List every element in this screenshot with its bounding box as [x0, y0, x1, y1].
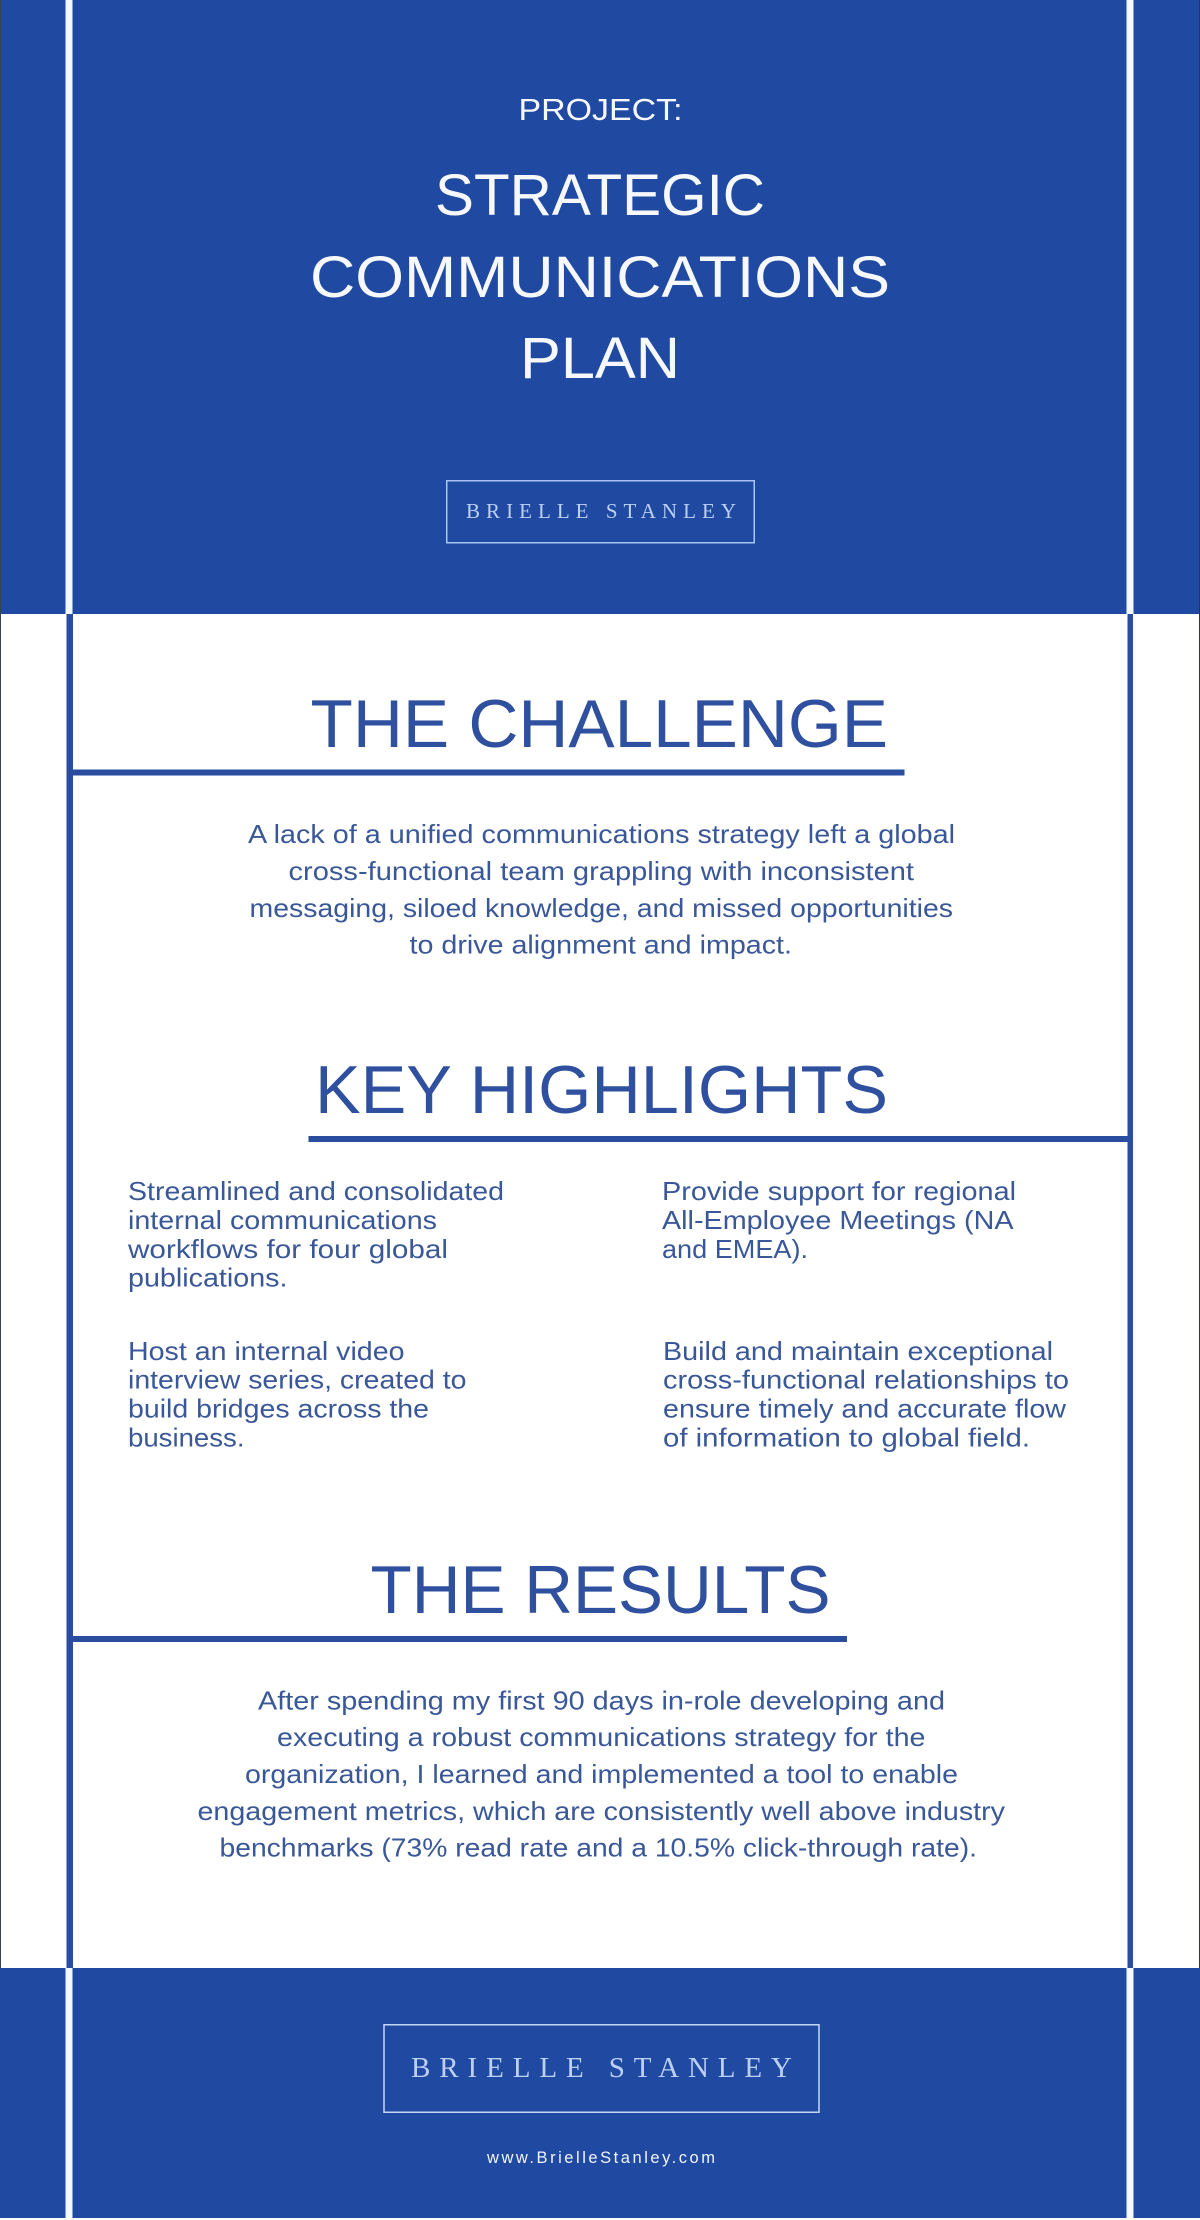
title: COMMUNICATIONS	[310, 245, 890, 310]
highlight: workflows: internal communications	[128, 1205, 437, 1235]
highlight: relationships	[663, 1336, 1069, 1452]
heading rule	[72, 1636, 847, 1642]
project label: PROJECT:	[518, 92, 682, 127]
challenge text: cross-functional team grappling with inconsistent	[288, 856, 915, 886]
title	[310, 163, 890, 391]
title: PLAN	[520, 326, 680, 391]
heading: the challenge: THE CHALLENGE	[310, 686, 888, 762]
highlight: workflows: publications.	[128, 1262, 288, 1292]
results text: organization, I learned and implemented a tool to enable	[245, 1759, 958, 1789]
footer panel	[0, 1968, 1200, 2218]
panel: the challenge	[72, 686, 955, 960]
highlight: video series: interview series, created to	[128, 1364, 466, 1394]
heading rule	[308, 1136, 1128, 1142]
highlight: video series	[128, 1336, 466, 1452]
website: www.BrielleStanley.com	[486, 2149, 715, 2167]
highlight: meetings: All-Employee Meetings (NA	[662, 1205, 1014, 1235]
results text: benchmarks (73% read rate and a 10.5% click-through rate).	[220, 1832, 977, 1862]
results text	[198, 1686, 1005, 1862]
challenge text: messaging, siloed knowledge, and missed opportunities	[250, 893, 953, 923]
results text: engagement metrics, which are consistently well above industry	[198, 1796, 1005, 1826]
heading rule	[72, 770, 904, 776]
heading: key highlights: KEY HIGHLIGHTS	[315, 1052, 888, 1128]
highlight: meetings	[662, 1176, 1016, 1264]
footer name badge	[384, 2025, 819, 2112]
name badge	[447, 481, 754, 543]
highlight: relationships: Build and maintain exceptional	[663, 1336, 1053, 1366]
highlight: workflows: Streamlined and consolidated	[128, 1176, 504, 1206]
header panel	[0, 0, 1200, 614]
body panel frame	[66, 614, 1133, 1968]
results text: executing a robust communications strategy for the	[277, 1722, 926, 1752]
heading: the results: THE RESULTS	[370, 1552, 830, 1628]
challenge text: A lack of a unified communications strategy left a global	[248, 819, 955, 849]
highlight: video series: business.	[128, 1422, 244, 1452]
panel: the results	[72, 1552, 1005, 1862]
highlight: video series: Host an internal video	[128, 1336, 404, 1366]
highlight: relationships: ensure timely and accurate flow	[663, 1394, 1066, 1424]
footer name badge: BRIELLE STANLEY	[411, 2052, 792, 2084]
highlight: meetings: and EMEA).	[662, 1234, 808, 1264]
highlight: video series: build bridges across the	[128, 1394, 429, 1424]
panel: key highlights	[127, 1052, 1128, 1452]
highlight: workflows	[127, 1176, 504, 1292]
highlight: workflows: workflows for four global	[127, 1234, 448, 1264]
results text: After spending my first 90 days in-role developing and	[258, 1686, 945, 1716]
challenge text: to drive alignment and impact.	[410, 930, 792, 960]
highlight: relationships: cross-functional relationships to	[663, 1364, 1069, 1394]
name badge: BRIELLE STANLEY	[466, 499, 736, 523]
title: STRATEGIC	[435, 163, 765, 228]
highlight: meetings: Provide support for regional	[662, 1176, 1016, 1206]
challenge text	[248, 819, 955, 960]
highlight: relationships: of information to global field.	[663, 1422, 1030, 1452]
